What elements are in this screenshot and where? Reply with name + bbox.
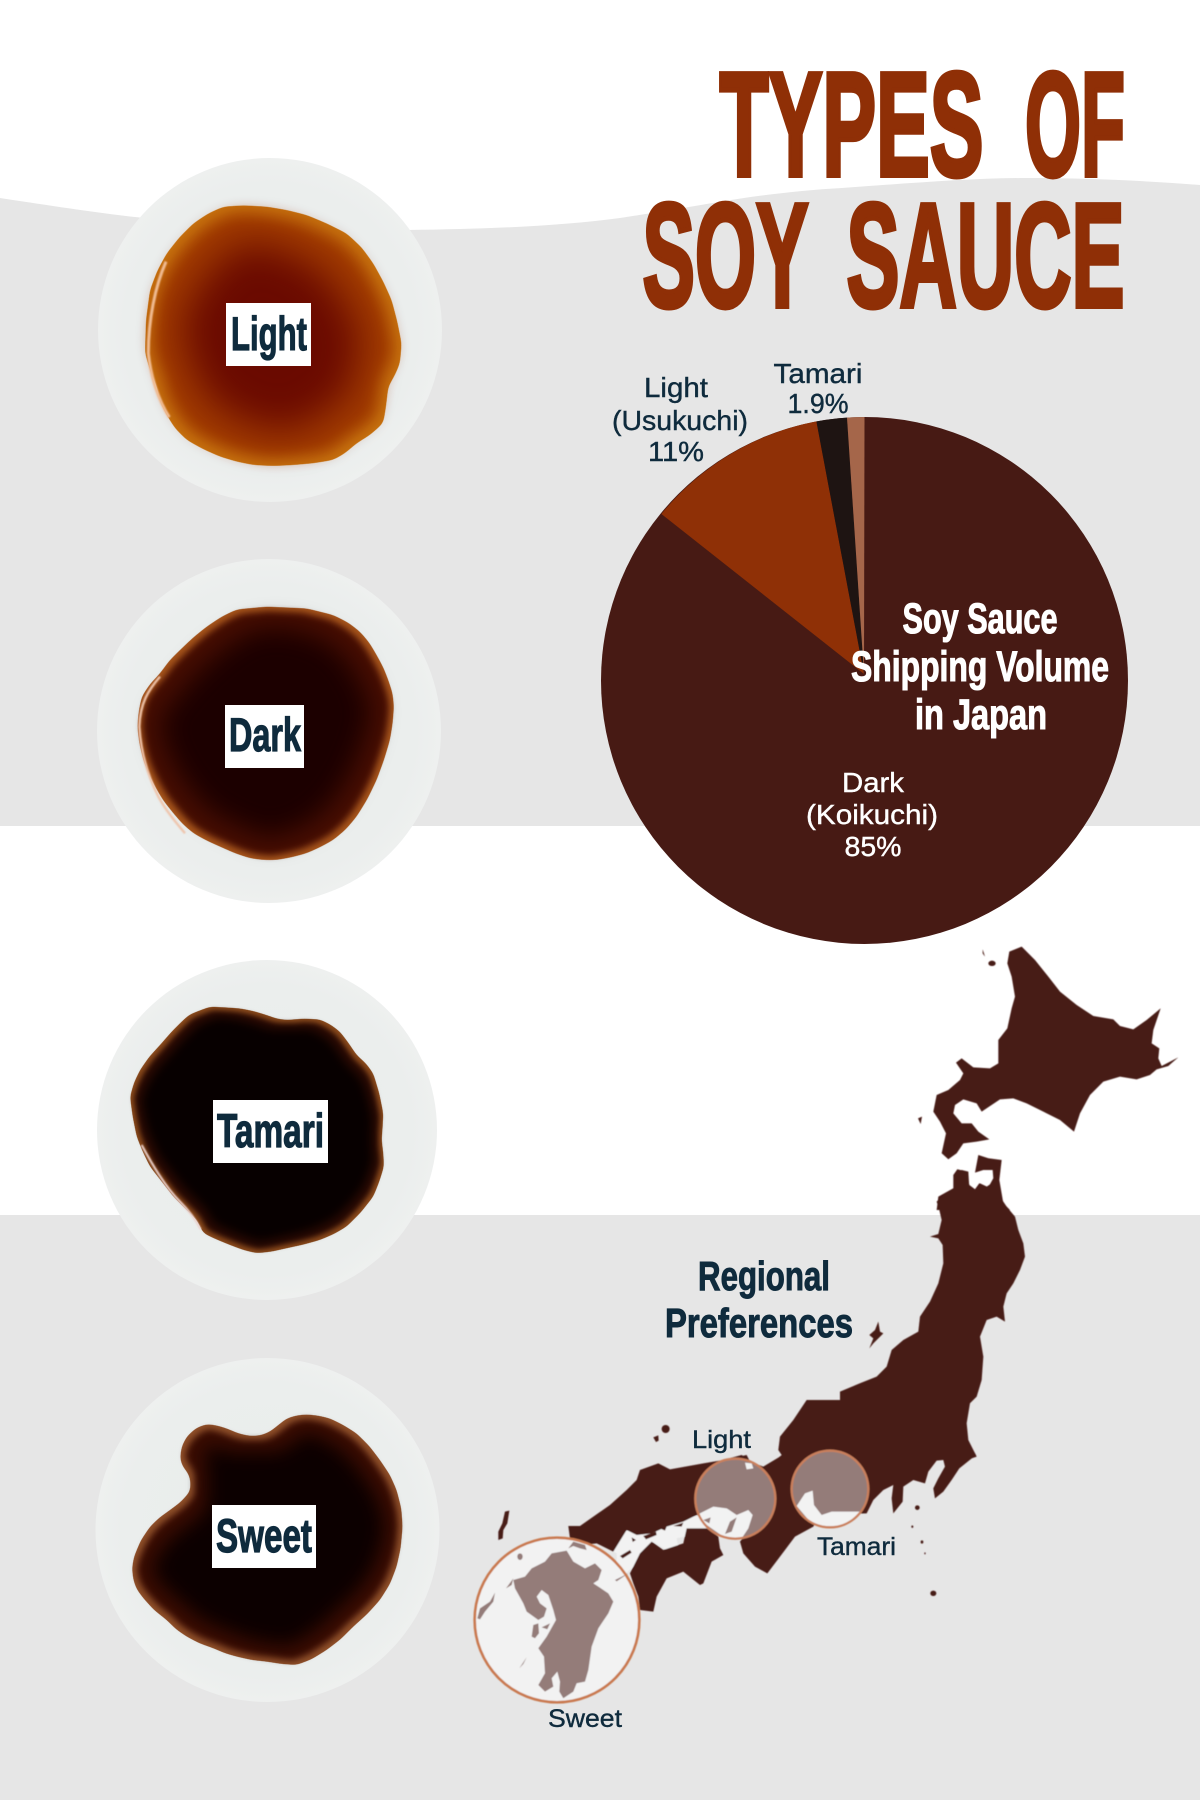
pie label: light: 11% [648, 436, 704, 467]
map label: tamari: Tamari [817, 1533, 896, 1561]
inland sea islands [620, 1550, 632, 1558]
western Honshu, Shikoku and islands [498, 1425, 780, 1612]
plate: dark soy sauce: Dark [229, 708, 302, 761]
title: SOY [642, 174, 808, 338]
western Honshu [568, 1455, 780, 1552]
title [642, 42, 1125, 338]
pie label: light: (Usukuchi) [612, 405, 748, 436]
inland sea [598, 1516, 712, 1578]
Hokkaido and northern tip of Honshu [918, 947, 1178, 1210]
background: upper grey band with wavy top edge [0, 178, 1200, 826]
pie heading [851, 595, 1109, 739]
heading: regional preferences [665, 1253, 853, 1346]
pie heading: in Japan [915, 691, 1047, 739]
pie label: tamari: Tamari [774, 358, 862, 389]
plate: light soy sauce [98, 158, 442, 502]
pie slice: other [847, 417, 864, 674]
map label: light: Light [692, 1426, 751, 1454]
pie label: dark: 85% [844, 831, 902, 862]
background: lower grey band [0, 1215, 1200, 1800]
heading: regional preferences: Preferences [665, 1300, 853, 1346]
Oki islands [662, 1425, 670, 1433]
plate: light soy sauce: Light [231, 307, 307, 360]
pie heading: Soy Sauce [902, 595, 1058, 643]
highlight circle: sweet region (Kyushu) [475, 1538, 639, 1702]
plate: sweet soy sauce [96, 1358, 440, 1702]
pie slice: tamari 1.9% [816, 418, 864, 674]
highlight circle: light region [695, 1459, 775, 1539]
plate: tamari soy sauce: Tamari [217, 1104, 324, 1157]
pie label: dark: Dark [842, 767, 905, 798]
pie label: dark [806, 767, 938, 862]
pie label: tamari [774, 358, 862, 419]
pie slice: light (usukuchi) 11% [661, 421, 864, 674]
Sado island [869, 1322, 883, 1348]
map label: sweet: Sweet [548, 1705, 622, 1733]
pie label: tamari: 1.9% [788, 388, 848, 419]
central Honshu and Kii peninsula [680, 1400, 976, 1596]
Shikoku [630, 1528, 723, 1612]
title: TYPES [720, 42, 984, 208]
pie chart: soy sauce shipping volume [601, 358, 1128, 944]
plate: dark soy sauce [97, 559, 441, 903]
map of Japan [475, 947, 1178, 1702]
plate: tamari soy sauce [97, 960, 437, 1300]
pie heading: Shipping Volume [851, 643, 1109, 691]
pie label: dark: (Koikuchi) [806, 799, 938, 830]
pie slice: dark (koikuchi) 85% [601, 417, 1128, 944]
pie label: light [612, 372, 748, 467]
northern Honshu (Tohoku and Chubu) [840, 1170, 1025, 1460]
pie label: light: Light [644, 372, 708, 403]
highlight circle: tamari region [792, 1451, 870, 1531]
plate: sweet soy sauce: Sweet [216, 1509, 312, 1562]
heading: regional preferences: Regional [698, 1253, 830, 1299]
Tsushima [498, 1511, 509, 1540]
highlight circles: light and tamari regions [695, 1451, 870, 1539]
